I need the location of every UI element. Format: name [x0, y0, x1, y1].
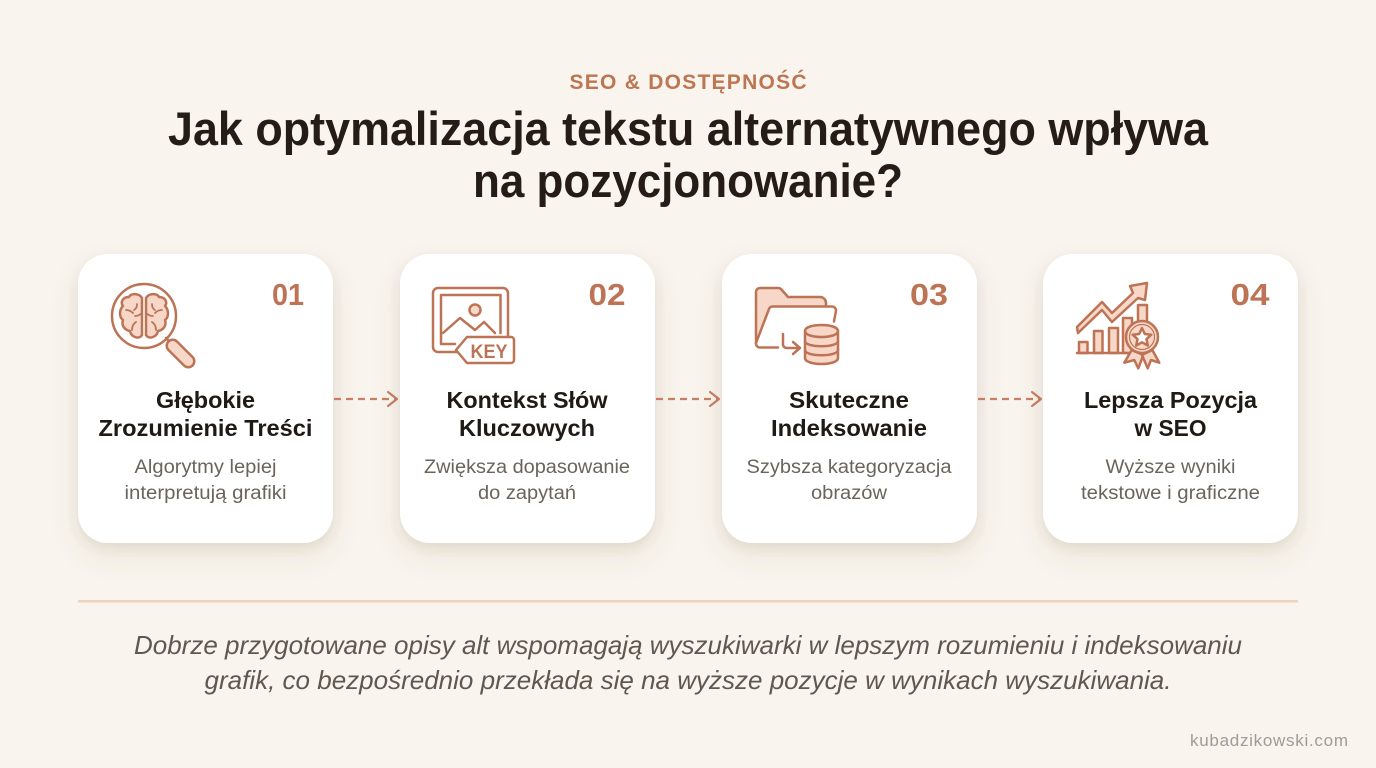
step heading: Kontekst Słów — [446, 387, 608, 413]
step heading: Indeksowanie — [771, 415, 927, 441]
step description: tekstowe i graficzne — [1081, 483, 1260, 504]
icon: folder and database — [756, 288, 838, 364]
icon: image with key tag — [433, 288, 514, 363]
step number 02: 02 — [588, 277, 626, 312]
step heading — [1084, 387, 1257, 441]
site credit: kubadzikowski.com — [1190, 731, 1348, 750]
step description — [1081, 457, 1260, 504]
step heading: Zrozumienie Treści — [98, 415, 312, 441]
step description: Wyższe wyniki — [1106, 457, 1236, 478]
panel: step 3 — [722, 254, 977, 543]
icon: image with key tag: KEY — [470, 342, 508, 363]
step heading — [446, 387, 608, 441]
step description: Zwiększa dopasowanie — [424, 457, 630, 478]
step description: Algorytmy lepiej — [134, 457, 276, 478]
step heading: Kluczowych — [459, 415, 595, 441]
arrow 1 to 2 — [334, 392, 397, 406]
step description — [424, 457, 630, 504]
step heading — [771, 387, 927, 441]
step heading: w SEO — [1134, 415, 1206, 441]
step description: do zapytań — [478, 483, 576, 504]
panel: step 4 — [1043, 254, 1298, 543]
step heading: Skuteczne — [789, 387, 909, 413]
step description: Szybsza kategoryzacja — [746, 457, 952, 478]
step description — [124, 457, 286, 504]
panel: step 1 — [78, 254, 333, 543]
closing statement — [134, 630, 1242, 695]
closing statement: grafik, co bezpośrednio przekłada się na wyższe pozycje w wynikach wyszukiwania. — [204, 665, 1172, 695]
step description: interpretują grafiki — [124, 483, 286, 504]
step number 03: 03 — [910, 277, 948, 312]
closing statement: Dobrze przygotowane opisy alt wspomagają wyszukiwarki w lepszym rozumieniu i indeksowaniu — [134, 630, 1242, 660]
arrow 2 to 3 — [656, 392, 719, 406]
eyebrow label: SEO & DOSTĘPNOŚĆ — [570, 70, 806, 94]
panel: step 2 — [400, 254, 655, 543]
step heading — [98, 387, 312, 441]
icon: rising chart with award badge — [1077, 283, 1159, 368]
step description — [746, 457, 952, 504]
step heading: Głębokie — [156, 387, 255, 413]
step number 01: 01 — [272, 277, 304, 312]
icon: brain under magnifying glass — [112, 284, 197, 370]
step heading: Lepsza Pozycja — [1084, 387, 1257, 413]
step number 04: 04 — [1230, 277, 1270, 312]
arrow 3 to 4 — [978, 392, 1041, 406]
title: na pozycjonowanie? — [473, 154, 903, 207]
title: Jak optymalizacja tekstu alternatywnego wpływa — [168, 102, 1209, 155]
step description: obrazów — [811, 483, 887, 504]
title — [168, 102, 1209, 207]
